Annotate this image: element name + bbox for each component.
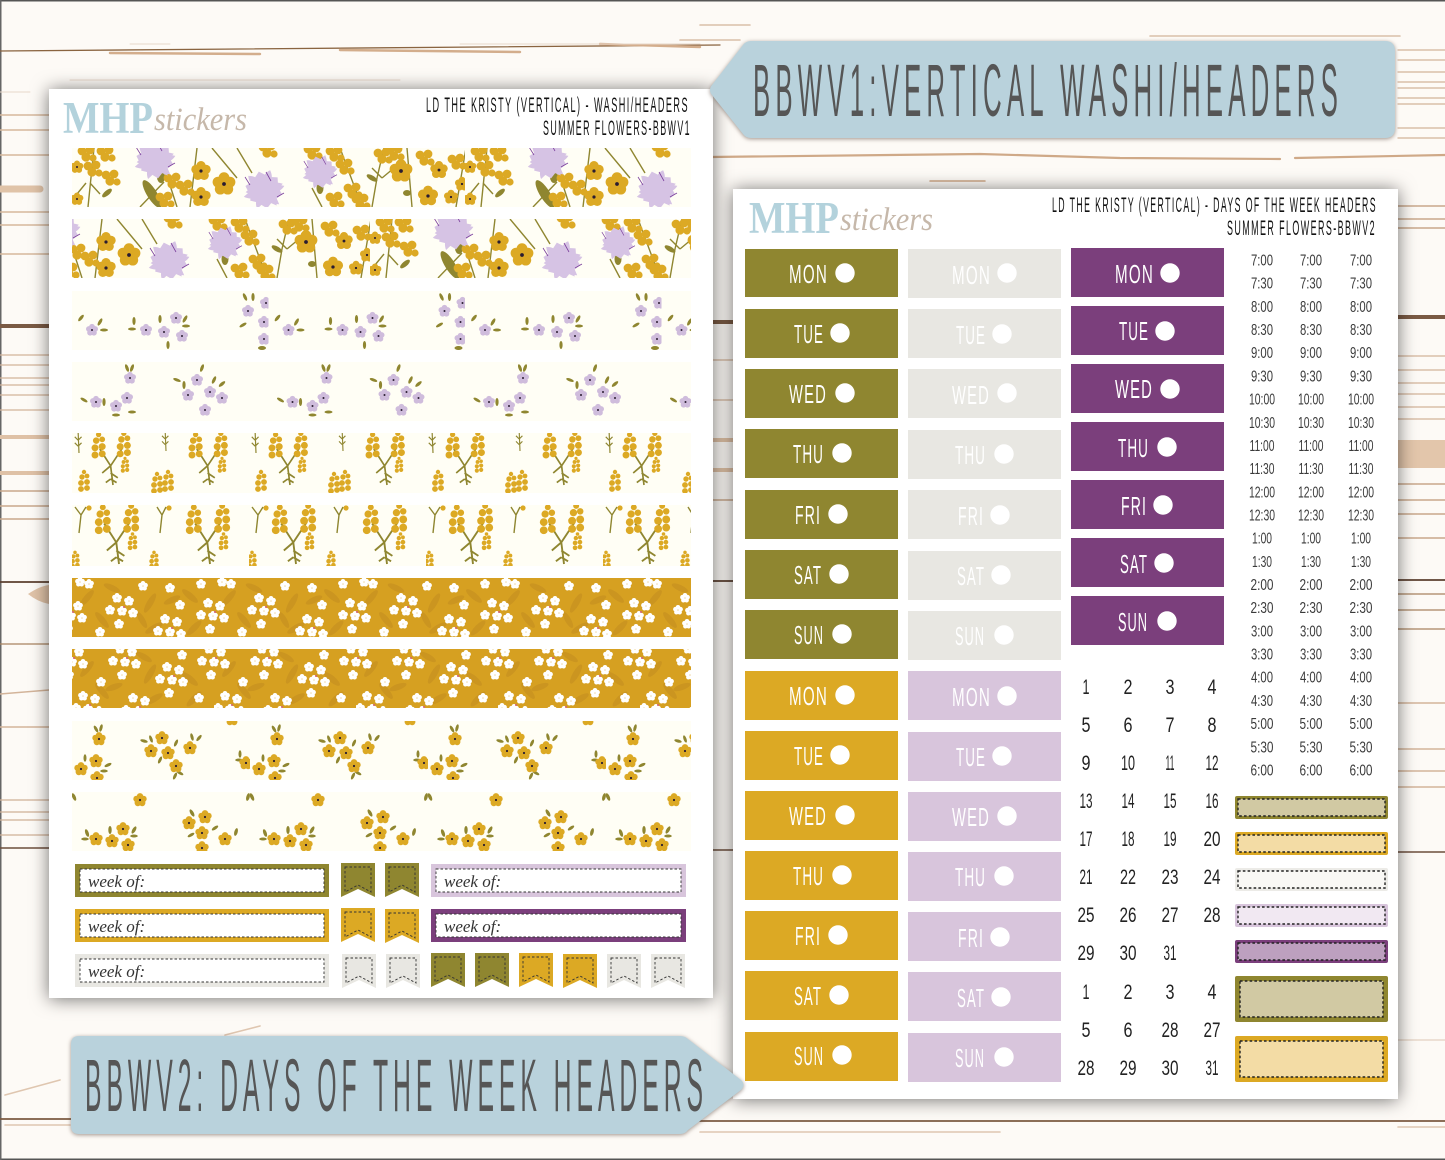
date number stickers: 4 xyxy=(1208,676,1217,699)
day labels olive xyxy=(745,249,898,659)
time stickers: 3:00 xyxy=(1350,623,1372,640)
date number stickers: 19 xyxy=(1164,828,1176,851)
time stickers: 3:00 xyxy=(1300,623,1322,640)
washi strip 9: small yellow flowers xyxy=(72,721,691,780)
day labels yellow: FRI xyxy=(795,921,821,951)
week of label grey xyxy=(75,954,329,987)
time stickers: 12:00 xyxy=(1298,484,1324,501)
date number stickers: 18 xyxy=(1122,828,1134,851)
time stickers: 2:00 xyxy=(1300,577,1323,594)
time stickers xyxy=(1249,252,1374,780)
date number stickers: 15 xyxy=(1164,790,1176,813)
time stickers: 11:30 xyxy=(1250,461,1275,478)
date number stickers: 1 xyxy=(1082,981,1090,1004)
time stickers: 9:30 xyxy=(1300,368,1322,385)
time stickers: 7:30 xyxy=(1300,276,1322,293)
date number stickers: 28 xyxy=(1162,1019,1178,1042)
time stickers: 1:00 xyxy=(1351,531,1371,548)
time stickers: 2:00 xyxy=(1350,577,1373,594)
day labels olive: FRI xyxy=(795,500,821,530)
date number stickers: 29 xyxy=(1078,942,1094,965)
washi strip 3: lilac flowers xyxy=(72,291,691,350)
time stickers: 5:30 xyxy=(1250,739,1274,756)
time stickers: 5:00 xyxy=(1350,716,1373,733)
day labels purple: MON xyxy=(1115,259,1154,289)
washi strip 1: mixed flowers xyxy=(72,148,691,207)
week of label lilac: week of: xyxy=(444,872,501,891)
time stickers: 5:00 xyxy=(1300,716,1323,733)
time stickers: 12:30 xyxy=(1348,508,1374,524)
time stickers: 12:30 xyxy=(1298,508,1324,524)
washi strip 5: yellow sprigs xyxy=(72,433,691,493)
time stickers: 12:00 xyxy=(1249,484,1275,501)
logo: MHP xyxy=(749,193,839,243)
week of label lilac xyxy=(431,864,686,897)
day labels yellow: SAT xyxy=(794,981,822,1011)
day labels purple: THU xyxy=(1118,433,1149,463)
time stickers: 8:30 xyxy=(1300,322,1322,339)
day labels lilac: SUN xyxy=(955,1043,985,1073)
time stickers: 10:00 xyxy=(1298,392,1324,409)
day labels grey: MON xyxy=(952,260,991,290)
time stickers: 10:00 xyxy=(1348,392,1374,409)
day labels lilac: TUE xyxy=(956,742,986,772)
day labels olive: MON xyxy=(789,259,828,289)
date number stickers: 28 xyxy=(1078,1057,1094,1080)
day labels lilac: MON xyxy=(952,682,991,712)
time stickers: 7:30 xyxy=(1350,276,1372,293)
date number stickers: 2 xyxy=(1124,981,1132,1004)
day labels olive: THU xyxy=(793,439,824,469)
date number stickers: 24 xyxy=(1204,866,1221,889)
sheet title xyxy=(1052,194,1377,240)
time stickers: 3:00 xyxy=(1251,623,1273,640)
date number stickers: 6 xyxy=(1124,1019,1132,1042)
time stickers: 4:00 xyxy=(1350,670,1372,687)
day labels purple: SUN xyxy=(1118,607,1148,637)
week of label olive xyxy=(75,864,329,897)
time stickers: 5:30 xyxy=(1350,739,1373,756)
date number stickers: 9 xyxy=(1082,752,1090,775)
sheet title xyxy=(426,94,691,140)
time stickers: 11:30 xyxy=(1298,461,1324,478)
time stickers: 4:30 xyxy=(1350,693,1372,710)
date number stickers: 12 xyxy=(1206,752,1218,775)
day labels lilac: SAT xyxy=(957,983,985,1013)
time stickers: 6:00 xyxy=(1350,762,1373,780)
day labels olive: WED xyxy=(789,379,827,409)
date number stickers: 28 xyxy=(1204,904,1220,927)
time stickers: 9:00 xyxy=(1350,345,1372,362)
date number stickers: 10 xyxy=(1121,752,1135,775)
day labels yellow xyxy=(745,671,898,1081)
time stickers: 5:00 xyxy=(1250,716,1274,733)
date number stickers: 4 xyxy=(1208,981,1217,1004)
time stickers: 4:00 xyxy=(1300,670,1322,687)
date number stickers: 14 xyxy=(1122,790,1135,813)
time stickers: 6:00 xyxy=(1300,762,1323,780)
washi strip 8: mustard with white flowers xyxy=(72,649,691,708)
date number stickers: 26 xyxy=(1120,904,1136,927)
date number stickers: 27 xyxy=(1162,904,1178,927)
logo: MHP xyxy=(63,93,153,143)
time stickers: 10:30 xyxy=(1249,415,1275,432)
week of label purple: week of: xyxy=(444,917,501,936)
time stickers: 7:30 xyxy=(1251,276,1273,293)
banner: BBWV2 arrow pointing right xyxy=(71,1036,744,1134)
date number stickers: 31 xyxy=(1164,942,1176,965)
time stickers: 11:00 xyxy=(1348,438,1374,455)
time stickers: 8:00 xyxy=(1300,299,1322,316)
date number stickers: 3 xyxy=(1166,981,1174,1004)
logo: stickers xyxy=(840,202,933,238)
date number stickers: 3 xyxy=(1166,676,1174,699)
day labels purple: TUE xyxy=(1119,316,1149,346)
time stickers: 5:30 xyxy=(1300,739,1323,756)
washi strip 6: yellow sprigs xyxy=(72,505,691,566)
time stickers: 1:30 xyxy=(1301,554,1321,571)
time stickers: 3:30 xyxy=(1350,647,1372,664)
washi strip 10: small yellow flowers xyxy=(72,792,691,851)
day labels lilac: THU xyxy=(955,862,986,892)
day labels purple: SAT xyxy=(1120,549,1148,579)
day labels lilac: FRI xyxy=(958,923,984,953)
time stickers: 7:00 xyxy=(1251,252,1273,270)
day labels grey: SAT xyxy=(957,561,985,591)
date number stickers: 22 xyxy=(1120,866,1136,889)
date number stickers: 1 xyxy=(1082,676,1090,699)
day labels purple xyxy=(1071,248,1224,645)
time stickers: 1:00 xyxy=(1301,531,1321,548)
time stickers: 12:30 xyxy=(1249,508,1275,524)
time stickers: 4:30 xyxy=(1300,693,1322,710)
date number stickers: 25 xyxy=(1078,904,1094,927)
time stickers: 4:00 xyxy=(1251,670,1273,687)
time stickers: 8:00 xyxy=(1350,299,1372,316)
day labels olive: SUN xyxy=(794,620,824,650)
time stickers: 10:00 xyxy=(1249,392,1275,409)
day labels grey: TUE xyxy=(956,320,986,350)
time stickers: 2:00 xyxy=(1250,577,1274,594)
date number stickers: 11 xyxy=(1166,752,1174,775)
time stickers: 9:30 xyxy=(1350,368,1372,385)
date number stickers: 7 xyxy=(1166,714,1174,737)
date number stickers: 17 xyxy=(1080,828,1092,851)
day labels purple: WED xyxy=(1115,374,1153,404)
day labels grey xyxy=(908,249,1061,660)
flag stickers xyxy=(341,863,685,988)
date number stickers: 6 xyxy=(1124,714,1132,737)
time stickers: 8:00 xyxy=(1251,299,1273,316)
day labels grey: THU xyxy=(955,440,986,470)
infographic canvas: LD THE KRISTY (VERTICAL) - WASHI/HEADERS xyxy=(426,94,689,117)
date number stickers: 30 xyxy=(1120,942,1136,965)
date number stickers: 21 xyxy=(1080,866,1092,889)
date number stickers: 5 xyxy=(1082,1019,1090,1042)
time stickers: 8:30 xyxy=(1350,322,1372,339)
time stickers: 11:00 xyxy=(1250,438,1275,455)
date number stickers: 2 xyxy=(1124,676,1132,699)
washi strip 4: lilac flowers xyxy=(72,362,691,421)
logo xyxy=(63,93,247,143)
date number stickers: 5 xyxy=(1082,714,1090,737)
infographic canvas: SUMMER FLOWERS-BBWV1 xyxy=(543,117,691,140)
washi strip 7: mustard with white flowers xyxy=(72,578,691,637)
day labels lilac xyxy=(908,671,1061,1082)
date number stickers: 8 xyxy=(1208,714,1216,737)
date number stickers: 30 xyxy=(1162,1057,1178,1080)
day labels grey: SUN xyxy=(955,621,985,651)
day labels purple: FRI xyxy=(1121,491,1147,521)
day labels lilac: WED xyxy=(952,802,990,832)
day labels yellow: SUN xyxy=(794,1041,824,1071)
time stickers: 1:30 xyxy=(1252,554,1272,571)
day labels yellow: MON xyxy=(789,681,828,711)
day labels yellow: TUE xyxy=(794,741,824,771)
washi strip 2: mixed flowers xyxy=(72,219,691,278)
time stickers: 2:30 xyxy=(1250,600,1274,617)
time stickers: 10:30 xyxy=(1298,415,1324,432)
time stickers: 9:00 xyxy=(1300,345,1322,362)
time stickers: 3:30 xyxy=(1300,647,1322,664)
time stickers: 3:30 xyxy=(1251,647,1273,664)
date number stickers: 16 xyxy=(1206,790,1218,813)
day labels grey: FRI xyxy=(958,501,984,531)
time stickers: 11:30 xyxy=(1348,461,1374,478)
day labels olive: SAT xyxy=(794,560,822,590)
time stickers: 9:30 xyxy=(1251,368,1273,385)
date number stickers xyxy=(1078,676,1221,1080)
time stickers: 1:30 xyxy=(1351,554,1371,571)
dashed box stickers xyxy=(1235,796,1388,1082)
time stickers: 6:00 xyxy=(1250,762,1274,780)
day labels yellow: THU xyxy=(793,861,824,891)
time stickers: 9:00 xyxy=(1251,345,1273,362)
time stickers: 7:00 xyxy=(1300,252,1322,270)
week of label yellow xyxy=(75,909,329,942)
time stickers: 11:00 xyxy=(1298,438,1324,455)
day labels grey: WED xyxy=(952,380,990,410)
day labels yellow: WED xyxy=(789,801,827,831)
date number stickers: 29 xyxy=(1120,1057,1136,1080)
time stickers: 8:30 xyxy=(1251,322,1273,339)
day labels olive: TUE xyxy=(794,319,824,349)
time stickers: 12:00 xyxy=(1348,484,1374,501)
panel: sheet 1 washi and headers xyxy=(49,89,713,998)
time stickers: 1:00 xyxy=(1252,531,1272,548)
week of label grey: week of: xyxy=(88,962,145,981)
time stickers: 10:30 xyxy=(1348,415,1374,432)
panel: sheet 2 days of the week headers xyxy=(733,189,1398,1099)
logo: stickers xyxy=(154,102,247,138)
week of label yellow: week of: xyxy=(88,917,145,936)
week of label purple xyxy=(431,909,686,942)
date number stickers: 23 xyxy=(1162,866,1178,889)
week of label olive: week of: xyxy=(88,872,145,891)
date number stickers: 31 xyxy=(1206,1057,1218,1080)
time stickers: 4:30 xyxy=(1251,693,1273,710)
date number stickers: 27 xyxy=(1204,1019,1220,1042)
time stickers: 7:00 xyxy=(1350,252,1372,270)
date number stickers: 20 xyxy=(1204,828,1220,851)
logo xyxy=(749,193,933,243)
time stickers: 2:30 xyxy=(1300,600,1323,617)
time stickers: 2:30 xyxy=(1350,600,1373,617)
date number stickers: 13 xyxy=(1080,790,1092,813)
